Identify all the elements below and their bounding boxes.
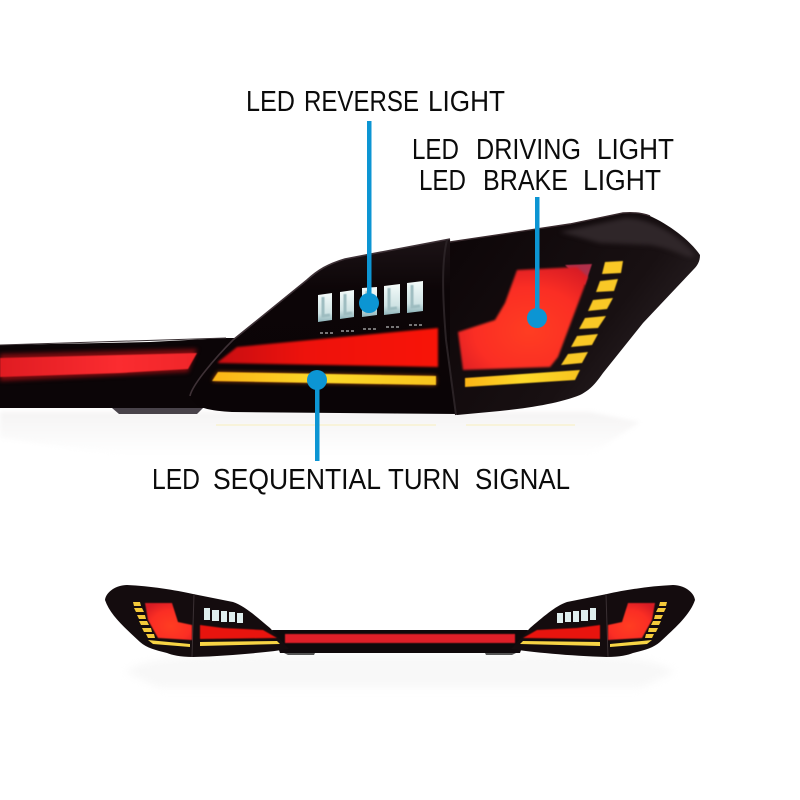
large tail light assembly [0,213,700,455]
full set product view [105,585,695,688]
center trunk bar, full set [272,630,528,655]
brake and driving light red panel [458,267,588,370]
label: sequential turn signal: SEQUENTIAL [213,464,381,496]
trunk bar glow [0,349,197,381]
leader line and dot: driving and brake light [527,197,547,328]
outer turn signal bar [465,370,580,387]
inner lamp red strip [218,328,438,367]
left inner red strip [200,625,277,639]
leader line and dot: turn signal [307,370,327,461]
right inner red strip [523,625,600,639]
left brake panel [145,603,192,640]
reflection under full set [125,655,675,688]
label: driving light: DRIVING [476,134,581,166]
label: driving light: LIGHT [597,134,674,166]
callout: LED reverse light [246,86,505,313]
brake panel pink corner [565,264,592,285]
right lamp, full set [511,585,695,657]
right brake panel [608,603,655,640]
label: sequential turn signal: LED [152,464,200,496]
label: brake light: LED [419,165,466,197]
label: reverse light: REVERSE [304,86,419,118]
label: driving light: LED [412,134,459,166]
label: sequential turn signal: SIGNAL [475,464,570,496]
right chevrons [645,602,667,638]
reflection under large tail light [0,412,640,455]
left chevrons [133,602,155,638]
leader line and dot: reverse light [359,121,379,313]
right reverse LEDs [557,608,596,623]
trunk bar red light [0,353,197,377]
label: reverse light: LED [246,86,295,118]
callout: LED driving and brake light [412,134,674,328]
left amber bars [148,640,280,647]
left lamp, full set [105,585,289,657]
right amber bars [520,640,652,647]
label: sequential turn signal: TURN [388,464,460,496]
label: brake light: BRAKE [483,165,568,197]
center trunk bar [0,338,245,414]
sequential turn signal glow [212,372,436,385]
outer lamp [443,213,700,415]
label: brake light: LIGHT [583,165,661,197]
sequential turn signal bar [212,372,436,385]
callout: LED sequential turn signal [152,370,570,496]
left reverse LEDs [204,608,243,623]
label: reverse light: LIGHT [428,86,505,118]
sequential chevrons [561,261,623,365]
trunk bar lower tab [112,408,203,414]
inner lamp [190,239,458,414]
reverse light LEDs [318,281,423,333]
